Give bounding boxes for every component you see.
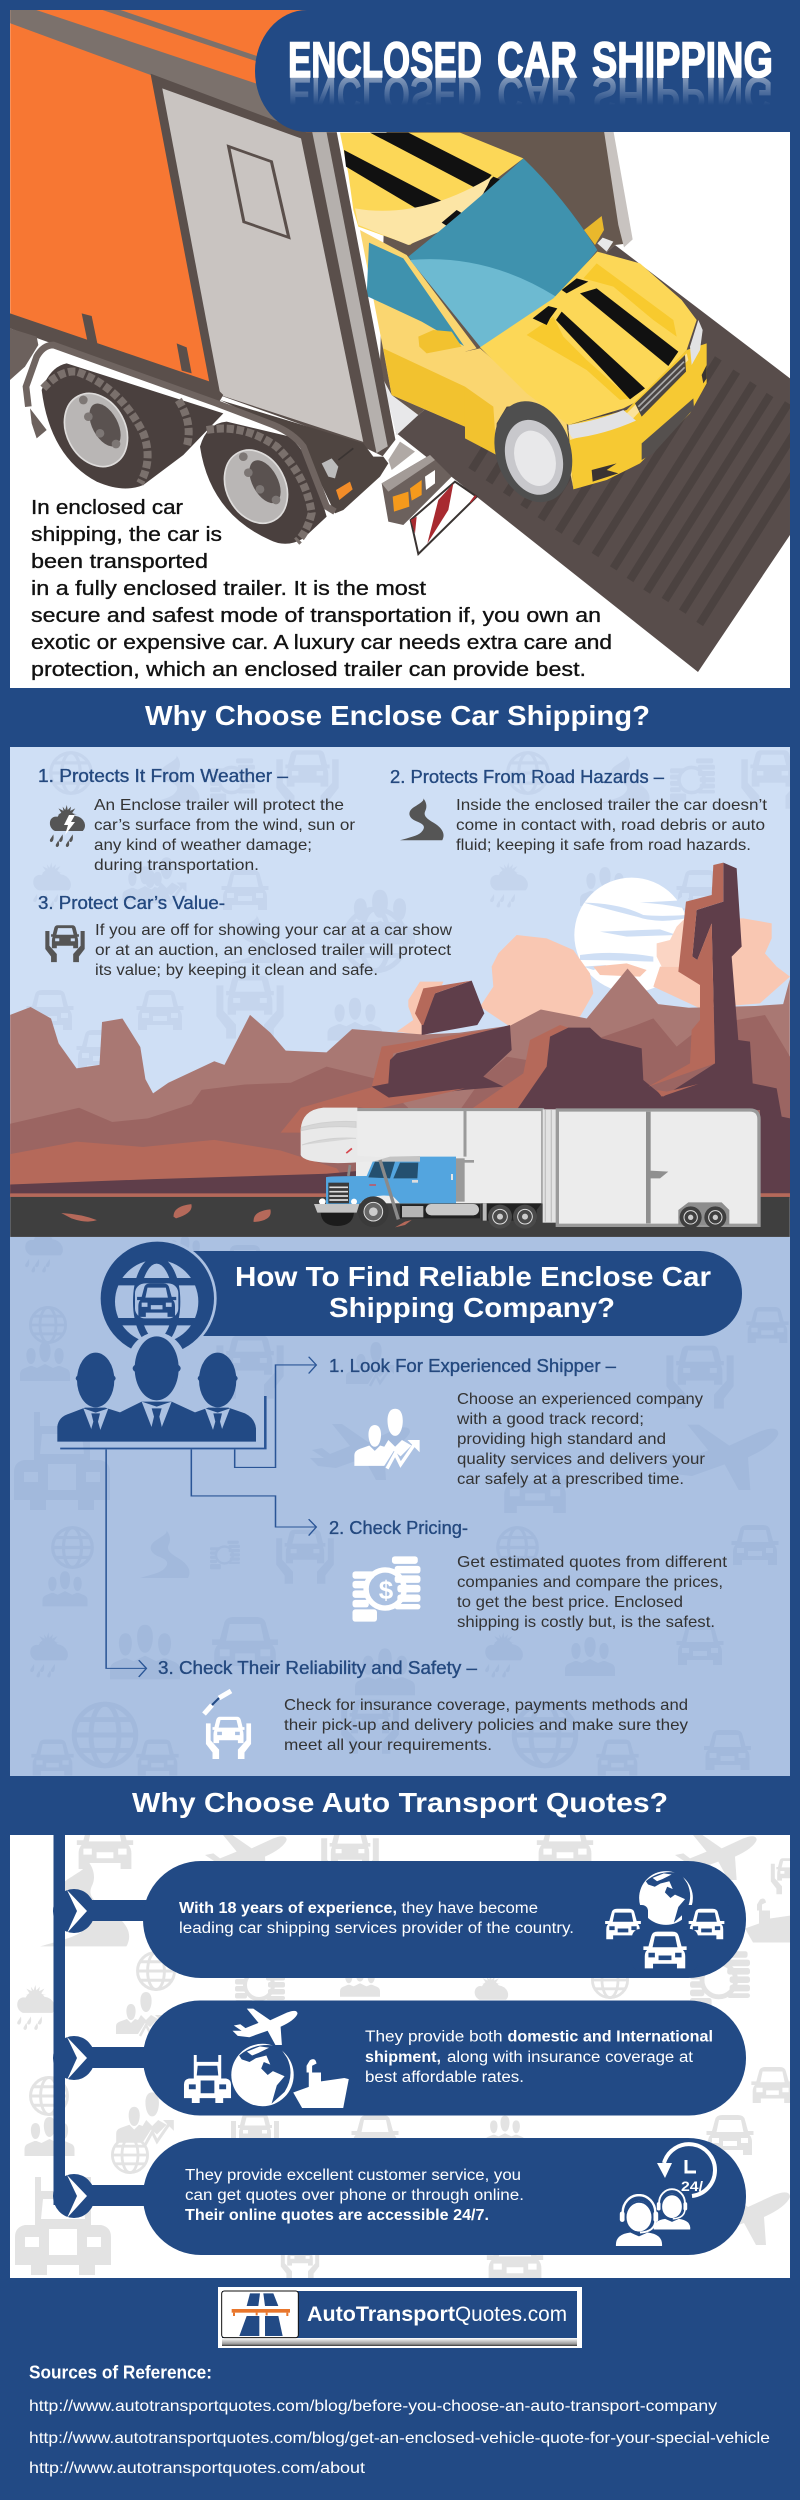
team silhouette (57, 1332, 256, 1442)
title reflection: CAR (497, 66, 577, 122)
step 3: Check for insurance coverage, payments methods and (284, 1697, 688, 1714)
icon: cars and globe (598, 1871, 732, 1971)
pill (143, 2000, 746, 2116)
reason 1 (38, 766, 356, 874)
reason 1: during transportation. (94, 857, 259, 874)
rock formations (356, 863, 790, 1197)
benefit 3: They provide excellent customer service, you (185, 2167, 521, 2184)
benefit 2 (53, 2000, 746, 2116)
benefit 1: leading car shipping services provider of the country. (179, 1920, 574, 1937)
sources of reference: http://www.autotransportquotes.com/about (29, 2460, 366, 2477)
panel: hero illustration (10, 10, 800, 688)
step 1: car safely at a prescribed time. (457, 1471, 684, 1488)
heading: why choose enclose car shipping: Why Choose Enclose Car Shipping? (145, 700, 650, 731)
front wheels (200, 422, 327, 544)
near mountains (10, 1140, 357, 1197)
panel: how to find a reliable company (10, 1228, 790, 1776)
reason 2: Inside the enclosed trailer the car doesn’t (456, 797, 768, 814)
flow connectors and arrows (60, 1357, 316, 1677)
step 3: their pick-up and delivery policies and make sure they (284, 1717, 688, 1734)
reason 1: car’s surface from the wind, sun or (94, 817, 356, 834)
heading banner (150, 1251, 742, 1336)
title: CAR (497, 32, 577, 88)
truck cab and nose (301, 1108, 480, 1227)
reason 3: 3. Protect Car’s Value- (38, 893, 225, 913)
icon: business people and chart (354, 1409, 420, 1469)
heading: How To Find Reliable Enclose Car (235, 1261, 711, 1292)
intro text: in a fully enclosed trailer. It is the most (31, 578, 427, 600)
watermark icons (14, 1228, 789, 1776)
reason 2: 2. Protects From Road Hazards – (390, 767, 664, 787)
far mountains (10, 968, 790, 1197)
reason 1: 1. Protects It From Weather – (38, 766, 288, 786)
benefit 3: can get quotes over phone or through online. (185, 2187, 524, 2204)
heading: Shipping Company? (329, 1292, 615, 1323)
reason 1: An Enclose trailer will protect the (94, 797, 344, 814)
icon: winding road (400, 798, 444, 840)
step 2: 2. Check Pricing- (329, 1518, 468, 1538)
watermark icons (26, 750, 800, 1070)
reason 3: If you are off for showing your car at a car show (95, 922, 452, 939)
icon: hands holding car (45, 925, 85, 962)
logo wordmark (307, 2303, 567, 2326)
heading (235, 1261, 711, 1323)
logo road icon (222, 2291, 298, 2338)
intro text: shipping, the car is (31, 524, 222, 546)
truck trailers (356, 1108, 759, 1229)
sources of reference: http://www.autotransportquotes.com/blog/before-you-choose-an-auto-transport-company (29, 2398, 717, 2415)
icon: chain and hands with car (204, 1691, 251, 1759)
benefit 2: along with insurance coverage at (447, 2049, 694, 2066)
road (10, 1193, 790, 1237)
benefit 2: domestic and International (508, 2028, 713, 2046)
intro text: secure and safest mode of transportation if, you own an (31, 605, 601, 627)
reason 2: come in contact with, road debris or auto (456, 817, 765, 834)
benefit 2: best affordable rates. (365, 2069, 524, 2086)
rear bumper and warning stripes (382, 442, 477, 554)
benefit 3: Their online quotes are accessible 24/7. (185, 2207, 489, 2224)
connector (53, 2174, 150, 2218)
watermark icons (15, 1821, 800, 2284)
reason 3 (38, 893, 452, 979)
step 2: to get the best price. Enclosed (457, 1594, 683, 1611)
sources of reference: http://www.autotransportquotes.com/blog/get-an-enclosed-vehicle-quote-for-your-special-vehicle (29, 2430, 770, 2447)
step 2: Get estimated quotes from different (457, 1554, 728, 1571)
benefit 2: shipment, (365, 2049, 441, 2066)
desert scene (10, 863, 790, 1237)
sun and clouds (397, 878, 790, 1035)
panel: reasons with desert scene (10, 747, 800, 1237)
trailer interior and open door (380, 127, 633, 435)
benefit 1: they have become (402, 1900, 538, 1917)
title reflection (288, 66, 773, 122)
icon: support agents and 24 hour clock: 24/ (681, 2178, 703, 2194)
intro text: In enclosed car (31, 497, 183, 519)
logo wordmark: Quotes.com (455, 2303, 567, 2326)
chassis (10, 313, 388, 513)
logo (218, 2287, 582, 2348)
sources of reference (29, 2362, 770, 2477)
orange panels (10, 10, 316, 382)
sources of reference: Sources of Reference: (29, 2362, 212, 2382)
timeline bar (54, 1835, 65, 2205)
panel: benefits (10, 1821, 800, 2284)
intro text: exotic or expensive car. A luxury car needs extra care and (31, 632, 612, 654)
step 3 (158, 1658, 688, 1759)
step 1: 1. Look For Experienced Shipper – (329, 1356, 616, 1376)
benefit 1 (53, 1861, 746, 1978)
intro text (31, 497, 612, 681)
benefit 3 (53, 2138, 746, 2255)
fender rail (26, 345, 335, 512)
pill (143, 1861, 746, 1978)
dark foreground strip (10, 1170, 367, 1194)
reason 3: its value; by keeping it clean and safe. (95, 962, 378, 979)
connector (53, 2036, 150, 2080)
heading: why choose auto transport quotes: Why Choose Auto Transport Quotes? (132, 1787, 668, 1818)
step 1: quality services and delivers your (457, 1451, 706, 1468)
icons: plane, truck, globe and ship (184, 2009, 349, 2108)
step 1: with a good track record; (456, 1411, 644, 1428)
reason 2: fluid; keeping it safe from road hazards. (456, 837, 751, 854)
reason 3: or at an auction, an enclosed trailer will protect (95, 942, 452, 959)
truck undercarriage and wheels (10, 313, 388, 544)
step 2 (329, 1518, 728, 1631)
lamp and switch (322, 448, 353, 500)
mid mountains (10, 1067, 408, 1197)
reason 2 (390, 767, 768, 854)
ramp (397, 245, 800, 672)
title: ENCLOSED (288, 32, 482, 88)
benefit 1: With 18 years of experience, (179, 1900, 397, 1917)
logo wordmark: AutoTransport (307, 2303, 455, 2326)
intro text: protection, which an enclosed trailer can provide best. (31, 659, 586, 681)
icon: support agents and 24 hour clock (616, 2144, 715, 2246)
rear wheels (42, 363, 223, 488)
emblem: globe and car (99, 1240, 215, 1356)
salmon ridge (281, 1087, 389, 1132)
icon: storm (50, 805, 85, 847)
step 1 (329, 1356, 706, 1488)
pill (143, 2138, 746, 2255)
reason 1: any kind of weather damage; (94, 837, 312, 854)
title reflection: ENCLOSED (288, 66, 482, 122)
car and ramp (340, 127, 800, 672)
title banner (255, 10, 800, 132)
step 3: meet all your requirements. (284, 1737, 492, 1754)
icon: coins (352, 1556, 420, 1622)
benefit 2: They provide both (365, 2028, 502, 2046)
step 1: providing high standard and (457, 1431, 666, 1448)
title (288, 32, 773, 88)
step 2: companies and compare the prices, (457, 1574, 723, 1591)
step 2: shipping is costly but, is the safest. (457, 1614, 715, 1631)
icon: coins: $ (379, 1575, 394, 1605)
intro text: been transported (31, 551, 208, 573)
trailer door (151, 74, 395, 456)
step 1: Choose an experienced company (457, 1391, 703, 1408)
hero truck and car illustration (10, 10, 800, 672)
orange trailer side and door (10, 10, 395, 456)
step 3: 3. Check Their Reliability and Safety – (158, 1658, 477, 1678)
car (340, 133, 707, 512)
connector (53, 1889, 150, 1933)
